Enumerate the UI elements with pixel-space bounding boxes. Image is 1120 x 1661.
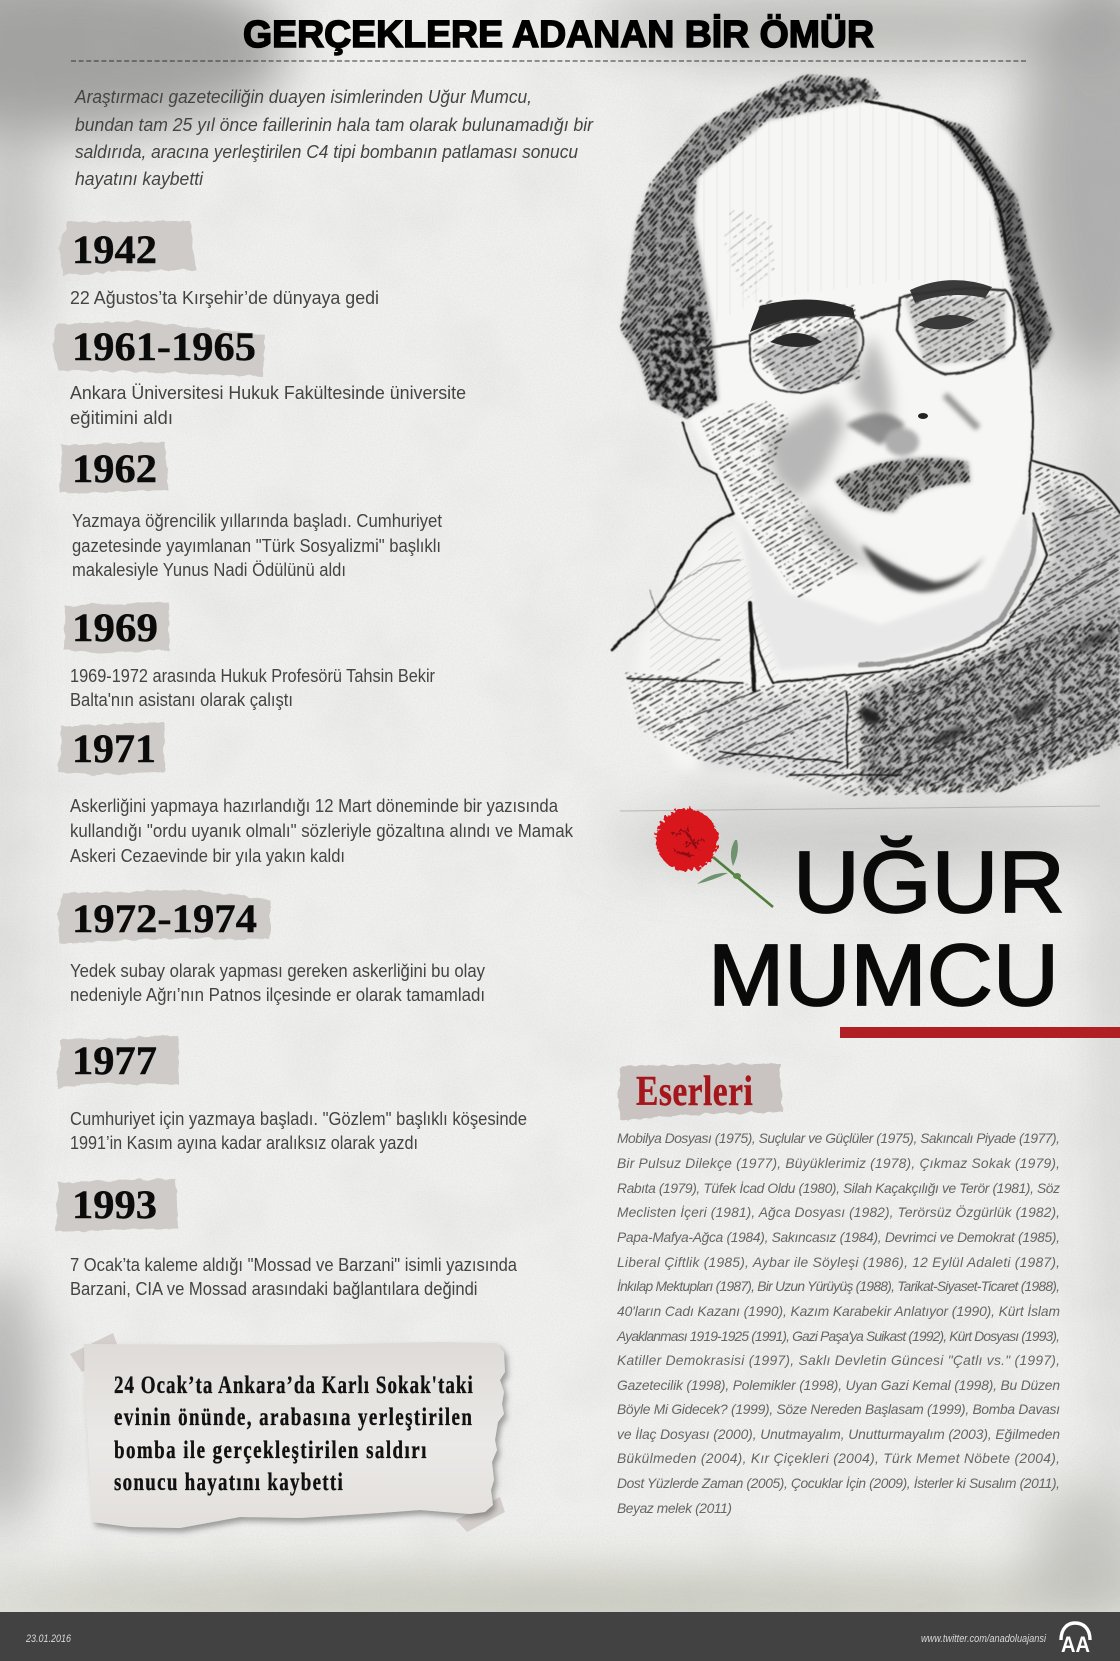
description 1969: 1969-1972 arasında Hukuk Profesörü Tahsin Bekir	[70, 665, 435, 686]
list of works: Gazetecilik (1998), Polemikler (1998), Uyan Gazi Kemal (1998), Bu Düzen	[617, 1378, 1060, 1393]
name: Uğur Mumcu: MUMCU	[708, 927, 1059, 1024]
year 1961-1965: 1961-1965	[72, 324, 256, 369]
year 1993: 1993	[72, 1182, 157, 1227]
list of works: Bir Pulsuz Dilekçe (1977), Büyüklerimiz (1978), Çıkmaz Sokak (1979),	[617, 1156, 1060, 1171]
forehead hatch	[722, 205, 775, 300]
list of works: Rabıta (1979), Tüfek İcad Oldu (1980), Silah Kaçakçılığı ve Terör (1981), Söz	[617, 1180, 1060, 1196]
year 1942: 1942	[72, 227, 157, 272]
description 1972-1974	[70, 960, 486, 1005]
year 1969: 1969	[72, 605, 158, 650]
torn paper callout: bomba ile gerçekleştirilen saldırı	[114, 1435, 426, 1464]
list of works: Liberal Çiftlik (1985), Aybar ile Söyleşi (1986), 12 Eylül Adaleti (1987),	[617, 1255, 1060, 1270]
description 1942: 22 Ağustos’ta Kırşehir’de dünyaya gedi	[70, 287, 379, 308]
description 1971: Askerliğini yapmaya hazırlandığı 12 Mart döneminde bir yazısında	[70, 795, 559, 816]
hair strokes	[620, 74, 1053, 419]
date: 23.01.2016	[25, 1633, 72, 1645]
description 1961-1965: eğitimini aldı	[70, 407, 173, 428]
jacket tones	[630, 468, 1120, 785]
description 1971: kullandığı "ordu uyanık olmalı" sözleriyle gözaltına alındı ve Mamak	[70, 820, 574, 841]
intro text: saldırıda, aracına yerleştirilen C4 tipi bombanın patlaması sonucu	[75, 141, 578, 162]
list of works: ve İlaç Dosyası (2000), Unutmayalım, Unutturmayalım (2003), Eğilmeden	[617, 1426, 1060, 1442]
name: Uğur Mumcu: UĞUR	[793, 834, 1065, 931]
list of works: Bükülmeden (2004), Kır Çiçekleri (2004), Türk Memet Nöbete (2004),	[617, 1451, 1060, 1466]
source url: www.twitter.com/anadoluajansi	[921, 1633, 1046, 1645]
icon: red carnation	[656, 809, 773, 907]
description 1962: makalesiyle Yunus Nadi Ödülünü aldı	[72, 559, 346, 580]
year 1961-1965	[52, 321, 265, 376]
list of works: Böyle Mi Gidecek? (1999), Söze Nereden Başlasam (1999), Bomba Davası	[617, 1402, 1060, 1417]
year 1942	[59, 221, 196, 275]
year 1993	[56, 1179, 178, 1232]
face hatching	[700, 290, 1005, 600]
torn paper callout	[70, 1333, 505, 1532]
torn paper callout: evinin önünde, arabasına yerleştirilen	[114, 1402, 472, 1431]
hair tones	[622, 76, 1052, 417]
description 1977	[70, 1108, 527, 1153]
glasses	[750, 315, 863, 393]
sketch outlines	[612, 102, 1120, 785]
year 1972-1974: 1972-1974	[72, 896, 257, 941]
description 1971	[70, 795, 574, 866]
year 1971	[58, 722, 165, 775]
list of works	[616, 1131, 1060, 1516]
list of works: Mobilya Dosyası (1975), Suçlular ve Güçlüler (1975), Sakıncalı Piyade (1977),	[617, 1131, 1060, 1146]
red bar	[840, 1027, 1120, 1038]
description 1972-1974: Yedek subay olarak yapması gereken askerliğini bu olay	[70, 960, 486, 981]
year 1972-1974	[58, 890, 270, 944]
jacket button and dark patches	[856, 625, 1117, 748]
heading: Eserleri: Eserleri	[636, 1069, 753, 1115]
face shading	[765, 335, 900, 570]
intro text: hayatını kaybetti	[75, 168, 204, 189]
jacket hatching	[625, 465, 1120, 796]
description 1993: 7 Ocak’ta kaleme aldığı "Mossad ve Barzani" isimli yazısında	[70, 1254, 518, 1275]
intro text: Araştırmacı gazeteciliğin duayen isimlerinden Uğur Mumcu,	[74, 86, 532, 107]
description 1962: Yazmaya öğrencilik yıllarında başladı. Cumhuriyet	[72, 510, 442, 531]
eyes and brows	[750, 280, 992, 419]
description 1977: 1991’in Kasım ayına kadar aralıksız olarak yazdı	[70, 1132, 418, 1153]
description 1977: Cumhuriyet için yazmaya başladı. "Gözlem" başlıklı köşesinde	[70, 1108, 527, 1129]
intro text: bundan tam 25 yıl önce faillerinin hala tam olarak bulunamadığı bir	[75, 114, 594, 135]
description 1962	[72, 510, 442, 580]
description 1961-1965: Ankara Üniversitesi Hukuk Fakültesinde üniversite	[70, 382, 466, 403]
torn paper callout: 24 Ocak’ta Ankara’da Karlı Sokak'taki	[114, 1370, 473, 1399]
list of works: Katiller Demokrasisi (1997), Saklı Devletin Güncesi "Çatlı vs." (1997),	[617, 1353, 1060, 1368]
icon: Anadolu Agency logo: AA	[1061, 1632, 1090, 1657]
year 1977: 1977	[72, 1038, 157, 1083]
year 1962: 1962	[72, 446, 157, 491]
icon: Anadolu Agency logo	[1061, 1623, 1090, 1657]
list of works: Papa-Mafya-Ağca (1984), Sakıncasız (1984), Devrimci ve Demokrat (1985),	[617, 1230, 1060, 1245]
list of works: Ayaklanması 1919-1925 (1991), Gazi Paşa'ya Suikast (1992), Kürt Dosyası (1993),	[616, 1329, 1060, 1344]
description 1961-1965	[70, 382, 466, 428]
description 1972-1974: nedeniyle Ağrı’nın Patnos ilçesinde er olarak tamamladı	[70, 984, 485, 1005]
year 1969	[64, 602, 169, 653]
description 1993	[70, 1254, 518, 1299]
description 1969	[70, 665, 435, 710]
list of works: Dost Yüzlerde Zaman (2005), Çocuklar İçin (2009), İsterler ki Susalım (2011),	[617, 1475, 1060, 1491]
title: GERÇEKLERE ADANAN BİR ÖMÜR	[243, 13, 874, 56]
intro text	[74, 86, 594, 189]
description 1962: gazetesinde yayımlanan "Türk Sosyalizmi" başlıklı	[72, 535, 441, 556]
torn paper callout: sonucu hayatını kaybetti	[114, 1467, 343, 1496]
year 1962	[60, 442, 168, 493]
list of works: 40'ların Cadı Kazanı (1990), Kazım Karabekir Anlatıyor (1990), Kürt İslam	[617, 1303, 1060, 1319]
name: Uğur Mumcu	[708, 834, 1065, 1024]
list of works: İnkılap Mektupları (1987), Bir Uzun Yürüyüş (1988), Tarikat-Siyaset-Ticaret (1988),	[617, 1278, 1060, 1294]
portrait sketch	[612, 74, 1120, 796]
year 1977	[57, 1036, 179, 1088]
description 1993: Barzani, CIA ve Mossad arasındaki bağlantılara değindi	[70, 1278, 478, 1299]
heading: Eserleri	[618, 1063, 783, 1120]
face tone	[690, 100, 1033, 630]
year 1971: 1971	[72, 726, 156, 771]
description 1969: Balta'nın asistanı olarak çalıştı	[70, 689, 293, 710]
list of works: Meclisten İçeri (1981), Ağca Dosyası (1982), Terörsüz Özgürlük (1982),	[617, 1203, 1060, 1220]
list of works: Beyaz melek (2011)	[617, 1501, 732, 1516]
footer bar	[0, 1612, 1120, 1661]
description 1971: Askeri Cezaevinde bir yıla yakın kaldı	[70, 845, 345, 866]
